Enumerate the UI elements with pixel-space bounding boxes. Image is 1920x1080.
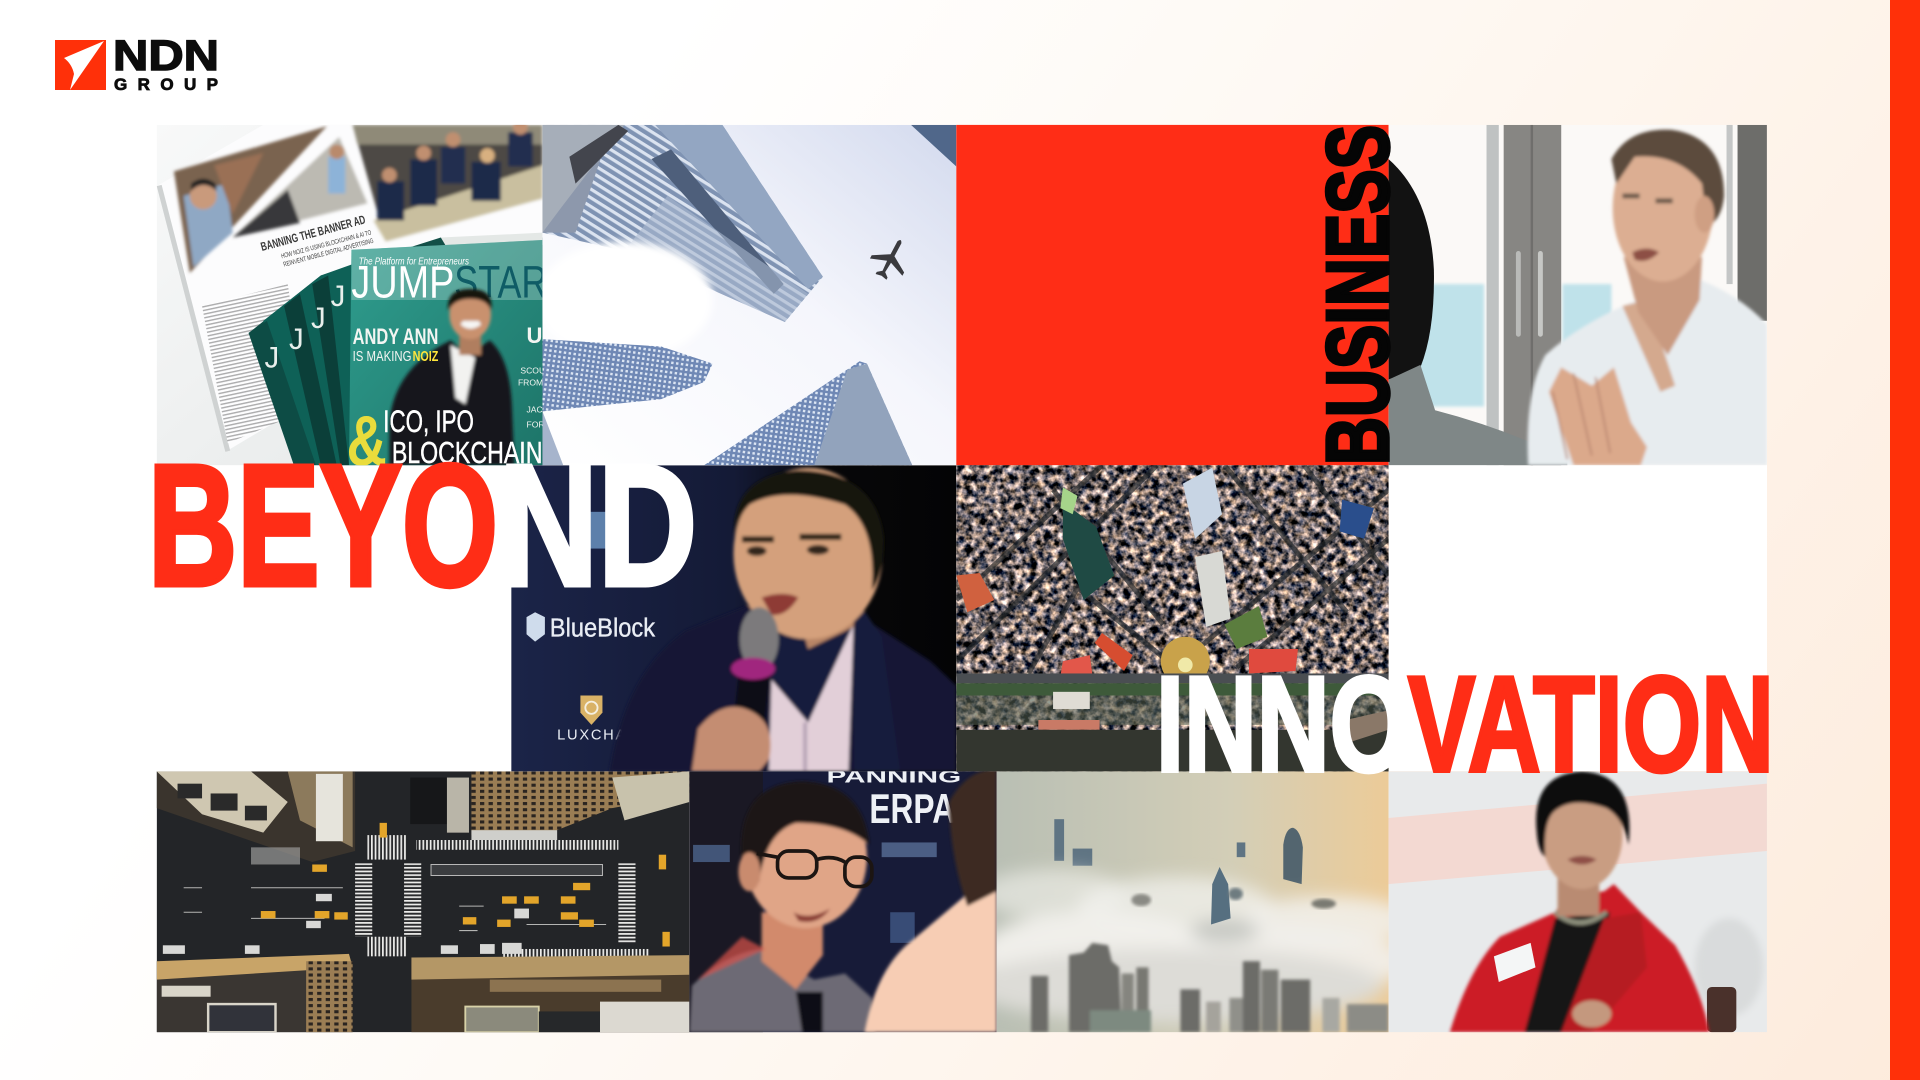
magazine cover: JAC (527, 405, 543, 415)
page headline: BANNING THE BANNER AD (259, 212, 367, 254)
white part INNO: INNO (1156, 648, 1408, 800)
photo: skyline above clouds (967, 771, 1414, 1032)
white towers (1183, 468, 1222, 539)
white cars (163, 894, 529, 954)
stack of green magazines (249, 238, 542, 465)
vertical heading: BUSINESS: BUSINESS (1308, 125, 1407, 465)
logo icon: red square with white arrow (55, 40, 106, 90)
crosswalks and lane marks (367, 835, 407, 860)
page photo: meeting room (233, 137, 367, 238)
building top-right (410, 771, 689, 840)
hand (1572, 1000, 1611, 1027)
photo: Jumpstart magazines: J (289, 323, 304, 356)
riverside trees (956, 683, 1389, 696)
door handles (1516, 251, 1521, 337)
cover headlines: ANDY ANN (353, 324, 438, 349)
magazine cover: STAR (454, 257, 547, 308)
red block (956, 125, 1389, 465)
tower left spire (542, 339, 713, 411)
tower bottom-right (704, 361, 912, 465)
logo: NDN Group (55, 32, 219, 94)
page body text (202, 284, 290, 443)
building bottom-left (157, 954, 353, 1032)
white panel behind INNOVATION (1389, 465, 1767, 771)
other person, back view (864, 769, 997, 1032)
magazine cover: The Platform for Entrepreneurs (359, 256, 469, 267)
tower top-right corner (911, 125, 956, 167)
building top-left (157, 771, 355, 862)
photo: Jumpstart magazines (157, 120, 557, 481)
white sun glare (542, 236, 716, 323)
speaker hand (692, 707, 771, 771)
magazine open page (157, 125, 542, 452)
logo wordmark GROUP: GROUP (114, 75, 218, 94)
page photo: man in blue shirt (174, 126, 327, 273)
cloud bank (967, 869, 1414, 1022)
speaker suit and shirt (610, 468, 956, 771)
magazine cover: SCOUR (520, 365, 551, 375)
magazine cover (348, 240, 542, 466)
photo: Jumpstart magazines: J (264, 341, 279, 374)
page headline (260, 216, 374, 266)
photo: Jumpstart magazines: J (311, 302, 326, 335)
name badge (1494, 943, 1536, 982)
white panel behind BEYOND (157, 465, 511, 771)
heading: INNOVATION (1156, 648, 1774, 800)
magazine cover: & (347, 402, 387, 481)
pink backdrop band (1389, 784, 1767, 884)
logo wordmark NDN: NDN (113, 32, 219, 80)
yellow taxis (261, 823, 670, 947)
central tower (1211, 867, 1231, 924)
river (956, 730, 1389, 771)
distant towers (1054, 819, 1245, 866)
riverside road (956, 673, 1389, 683)
microphone (734, 678, 770, 720)
green park (1224, 606, 1267, 649)
backdrop logo BlueBlock: BlueBlock (550, 615, 655, 643)
magazine cover: ICO, IPO (383, 403, 474, 439)
page photo: team group (353, 120, 542, 241)
photo: aerial view of city (956, 465, 1389, 771)
speaker head (802, 620, 857, 652)
backdrop logo Luxchain: LUXCHAI (557, 728, 633, 744)
tall tower (1283, 828, 1303, 884)
backdrop text: ERPA (869, 785, 955, 832)
photo: man in white shirt talking (1389, 125, 1767, 465)
red part VATION: VATION (1408, 648, 1774, 800)
photo collage, drawn in 1568-wide coordinates (157, 120, 1767, 1032)
chair (1707, 987, 1736, 1032)
backdrop text: PANNING (827, 766, 961, 786)
round plaza (1161, 637, 1210, 686)
photo: man with glasses in conversation (689, 766, 997, 1032)
window sea view (1421, 282, 1486, 408)
building bottom-right (411, 955, 689, 1032)
diagonal streets (956, 465, 1389, 673)
dark glass tower (1063, 502, 1114, 600)
magazine cover: US (527, 323, 557, 348)
photo: woman in red jacket (1389, 771, 1767, 1032)
person back of head (1389, 159, 1567, 465)
red part BEYO: BEYO (148, 428, 498, 622)
glasses (757, 851, 872, 887)
magazine cover: FOR (527, 419, 545, 429)
page headline: HOW NOIZ IS USING BLOCKCHAIN & AI TO (280, 229, 372, 260)
photo: speaker with microphone (511, 465, 956, 771)
heading: BEYOND (148, 428, 697, 622)
photo: Jumpstart magazines: J (331, 280, 345, 313)
tower top-left wedge (542, 125, 823, 322)
cover man (389, 289, 514, 465)
white part ND: ND (499, 428, 697, 622)
window frames (1487, 125, 1499, 465)
page headline: REINVENT MOBILE DIGITAL ADVERTISING (283, 238, 374, 269)
woman figure (1450, 771, 1709, 1032)
icon: airplane (870, 240, 904, 280)
man with glasses (689, 781, 876, 1032)
chair shadow (1695, 918, 1763, 1016)
red roofs (956, 573, 994, 612)
backdrop logo Luxchain (558, 696, 622, 740)
cover title: JUMP (351, 257, 454, 308)
backdrop text (827, 766, 961, 832)
foreground high-rises (1031, 943, 1389, 1032)
magazine cover: FROM U (518, 378, 552, 388)
man speaking (1528, 130, 1767, 465)
magazine cover: BLOCKCHAIN (392, 436, 542, 470)
photo: skyscrapers and airplane (536, 125, 956, 465)
magazine cover: IS MAKING (353, 349, 411, 365)
right edge red bar (1890, 0, 1920, 1080)
photo: city intersection from above (157, 771, 689, 1032)
magazine cover: NOIZ (413, 349, 438, 365)
